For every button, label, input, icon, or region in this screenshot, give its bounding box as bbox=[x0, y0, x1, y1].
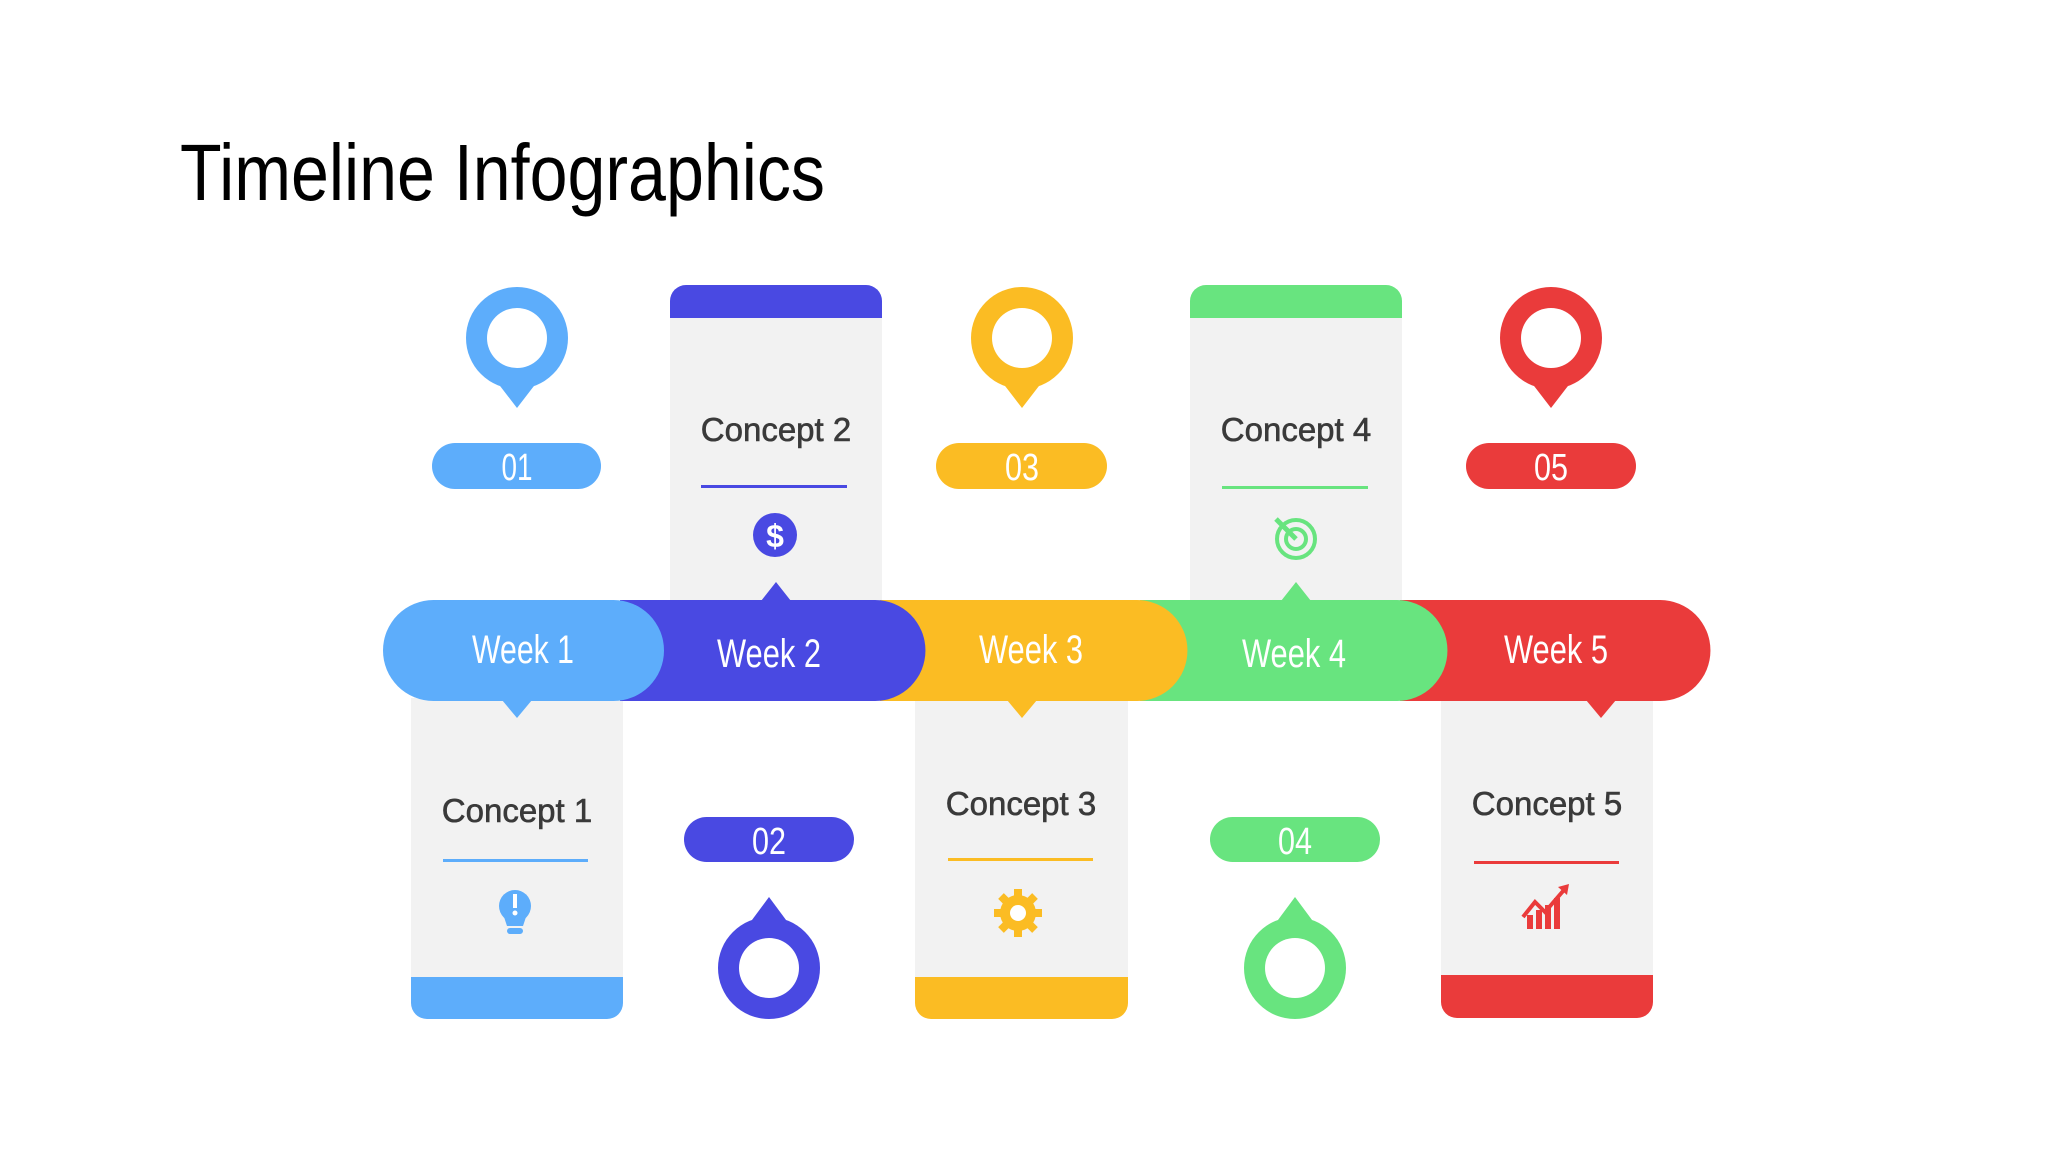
timeline bar bbox=[383, 582, 1710, 718]
card: concept 3 bbox=[915, 698, 1128, 1019]
title: Timeline Infographics bbox=[180, 128, 825, 217]
icon: dollar bbox=[753, 513, 797, 557]
pin 05 bbox=[1500, 287, 1602, 408]
card: concept 2: Concept 2 bbox=[701, 411, 851, 448]
pin 04 bbox=[1244, 897, 1346, 1019]
week 3 segment: Week 3 bbox=[979, 628, 1083, 672]
week 1 segment bbox=[383, 600, 664, 718]
week 3 segment bbox=[880, 600, 1187, 718]
icon: dollar: $ bbox=[766, 518, 784, 554]
card: concept 5: Concept 5 bbox=[1472, 785, 1622, 822]
card: concept 4: Concept 4 bbox=[1221, 411, 1371, 448]
card: concept 1: Concept 1 bbox=[442, 792, 592, 829]
week 4 segment bbox=[1140, 582, 1447, 701]
pill 04 bbox=[1210, 817, 1380, 863]
pill 02 bbox=[684, 817, 854, 863]
pill 02: 02 bbox=[752, 821, 786, 863]
card: concept 4 bbox=[1190, 285, 1402, 603]
pin 01 bbox=[466, 287, 568, 408]
pill 04: 04 bbox=[1278, 821, 1312, 863]
card: concept 1 bbox=[411, 698, 623, 1019]
pin 03 bbox=[971, 287, 1073, 408]
card: concept 5 bbox=[1441, 698, 1653, 1018]
pill 01 bbox=[432, 443, 601, 489]
icon: gear bbox=[994, 889, 1042, 937]
icon: bulb bbox=[499, 890, 531, 934]
week 2 segment bbox=[620, 582, 925, 701]
pill 03: 03 bbox=[1005, 447, 1039, 489]
week 2 segment: Week 2 bbox=[717, 632, 821, 676]
week 5 segment: Week 5 bbox=[1504, 628, 1608, 672]
icon: chart bbox=[1523, 884, 1569, 929]
card: concept 3: Concept 3 bbox=[946, 785, 1096, 822]
pin 02 bbox=[718, 897, 820, 1019]
pill 01: 01 bbox=[502, 447, 532, 489]
icon: target bbox=[1276, 519, 1315, 558]
pill 05: 05 bbox=[1534, 447, 1568, 489]
pill 05 bbox=[1466, 443, 1636, 489]
pill 03 bbox=[936, 443, 1107, 489]
week 5 segment bbox=[1400, 600, 1710, 718]
card: concept 2 bbox=[670, 285, 882, 603]
week 4 segment: Week 4 bbox=[1242, 632, 1346, 676]
week 1 segment: Week 1 bbox=[472, 628, 574, 672]
